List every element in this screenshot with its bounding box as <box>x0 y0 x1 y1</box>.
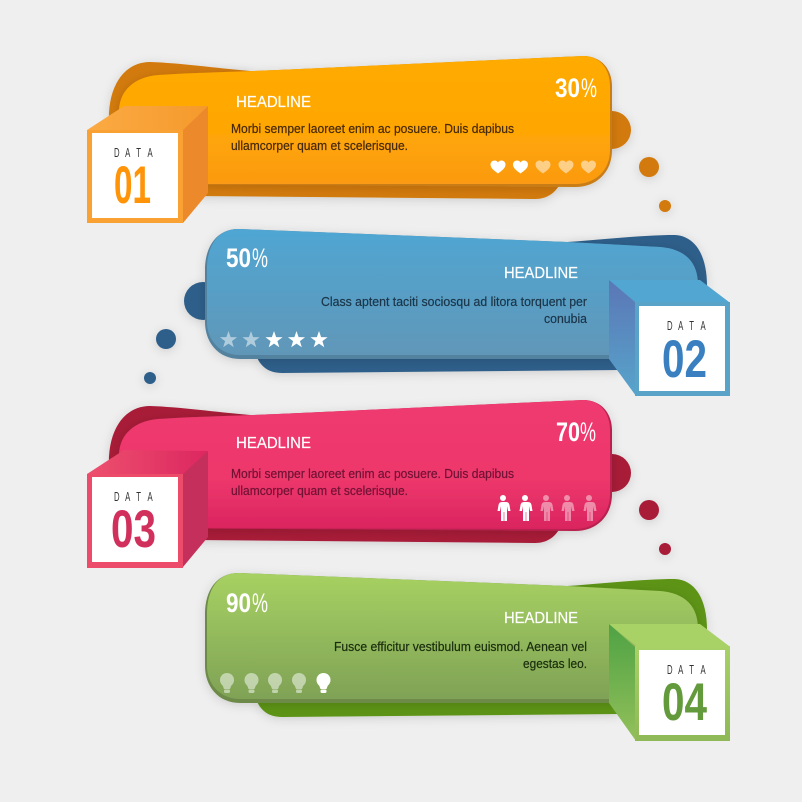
cube 01: 01 <box>114 156 151 215</box>
panel: 03 pink <box>87 400 671 568</box>
banner <box>205 573 698 703</box>
icons: people <box>498 495 596 521</box>
headline: HEADLINE <box>504 610 578 627</box>
cube 03: 03 <box>111 500 156 559</box>
back shape <box>144 235 707 384</box>
percentage: % <box>581 73 597 103</box>
panel: 01 orange <box>87 56 671 223</box>
banner <box>205 229 698 359</box>
body text: ullamcorper quam et scelerisque. <box>231 139 408 153</box>
icons: stars <box>220 331 328 347</box>
cube 02: 02 <box>662 330 707 389</box>
back shape <box>109 62 671 212</box>
back shape <box>109 406 671 555</box>
body text: Morbi semper laoreet enim ac posuere. Duis dapibus <box>231 467 514 481</box>
headline: HEADLINE <box>236 94 311 111</box>
percentage: 30 <box>555 73 580 103</box>
percentage: 50 <box>226 243 251 273</box>
percentage: % <box>252 243 268 273</box>
panel: 02 blue <box>144 229 730 396</box>
percentage: 70 <box>556 417 580 447</box>
body text: conubia <box>544 312 587 326</box>
body text <box>231 122 514 153</box>
icons: hearts <box>490 160 596 174</box>
icons: light bulbs <box>220 673 330 693</box>
back shape <box>256 579 707 717</box>
body text <box>334 640 587 671</box>
percentage: % <box>580 417 596 447</box>
headline: HEADLINE <box>236 435 311 452</box>
banner <box>119 56 612 187</box>
body text <box>321 295 587 326</box>
body text: Fusce efficitur vestibulum euismod. Aenean vel <box>334 640 587 654</box>
cube 03 <box>87 450 208 568</box>
cube 02 <box>609 280 730 396</box>
panel: 04 green <box>205 573 730 741</box>
headline: HEADLINE <box>504 265 578 282</box>
cube 04 <box>609 624 730 741</box>
cube 01: DATA <box>114 147 153 161</box>
percentage: % <box>252 588 268 618</box>
cube 01 <box>87 106 208 223</box>
banner <box>119 400 612 531</box>
body text: egestas leo. <box>523 657 587 671</box>
cube 03: DATA <box>114 491 153 505</box>
body text: Morbi semper laoreet enim ac posuere. Duis dapibus <box>231 122 514 136</box>
cube 04: 04 <box>662 673 707 732</box>
body text <box>231 467 514 498</box>
body text: ullamcorper quam et scelerisque. <box>231 484 408 498</box>
cube 02: DATA <box>667 320 706 334</box>
cube 04: DATA <box>667 664 706 678</box>
percentage: 90 <box>226 588 251 618</box>
body text: Class aptent taciti sociosqu ad litora torquent per <box>321 295 587 309</box>
